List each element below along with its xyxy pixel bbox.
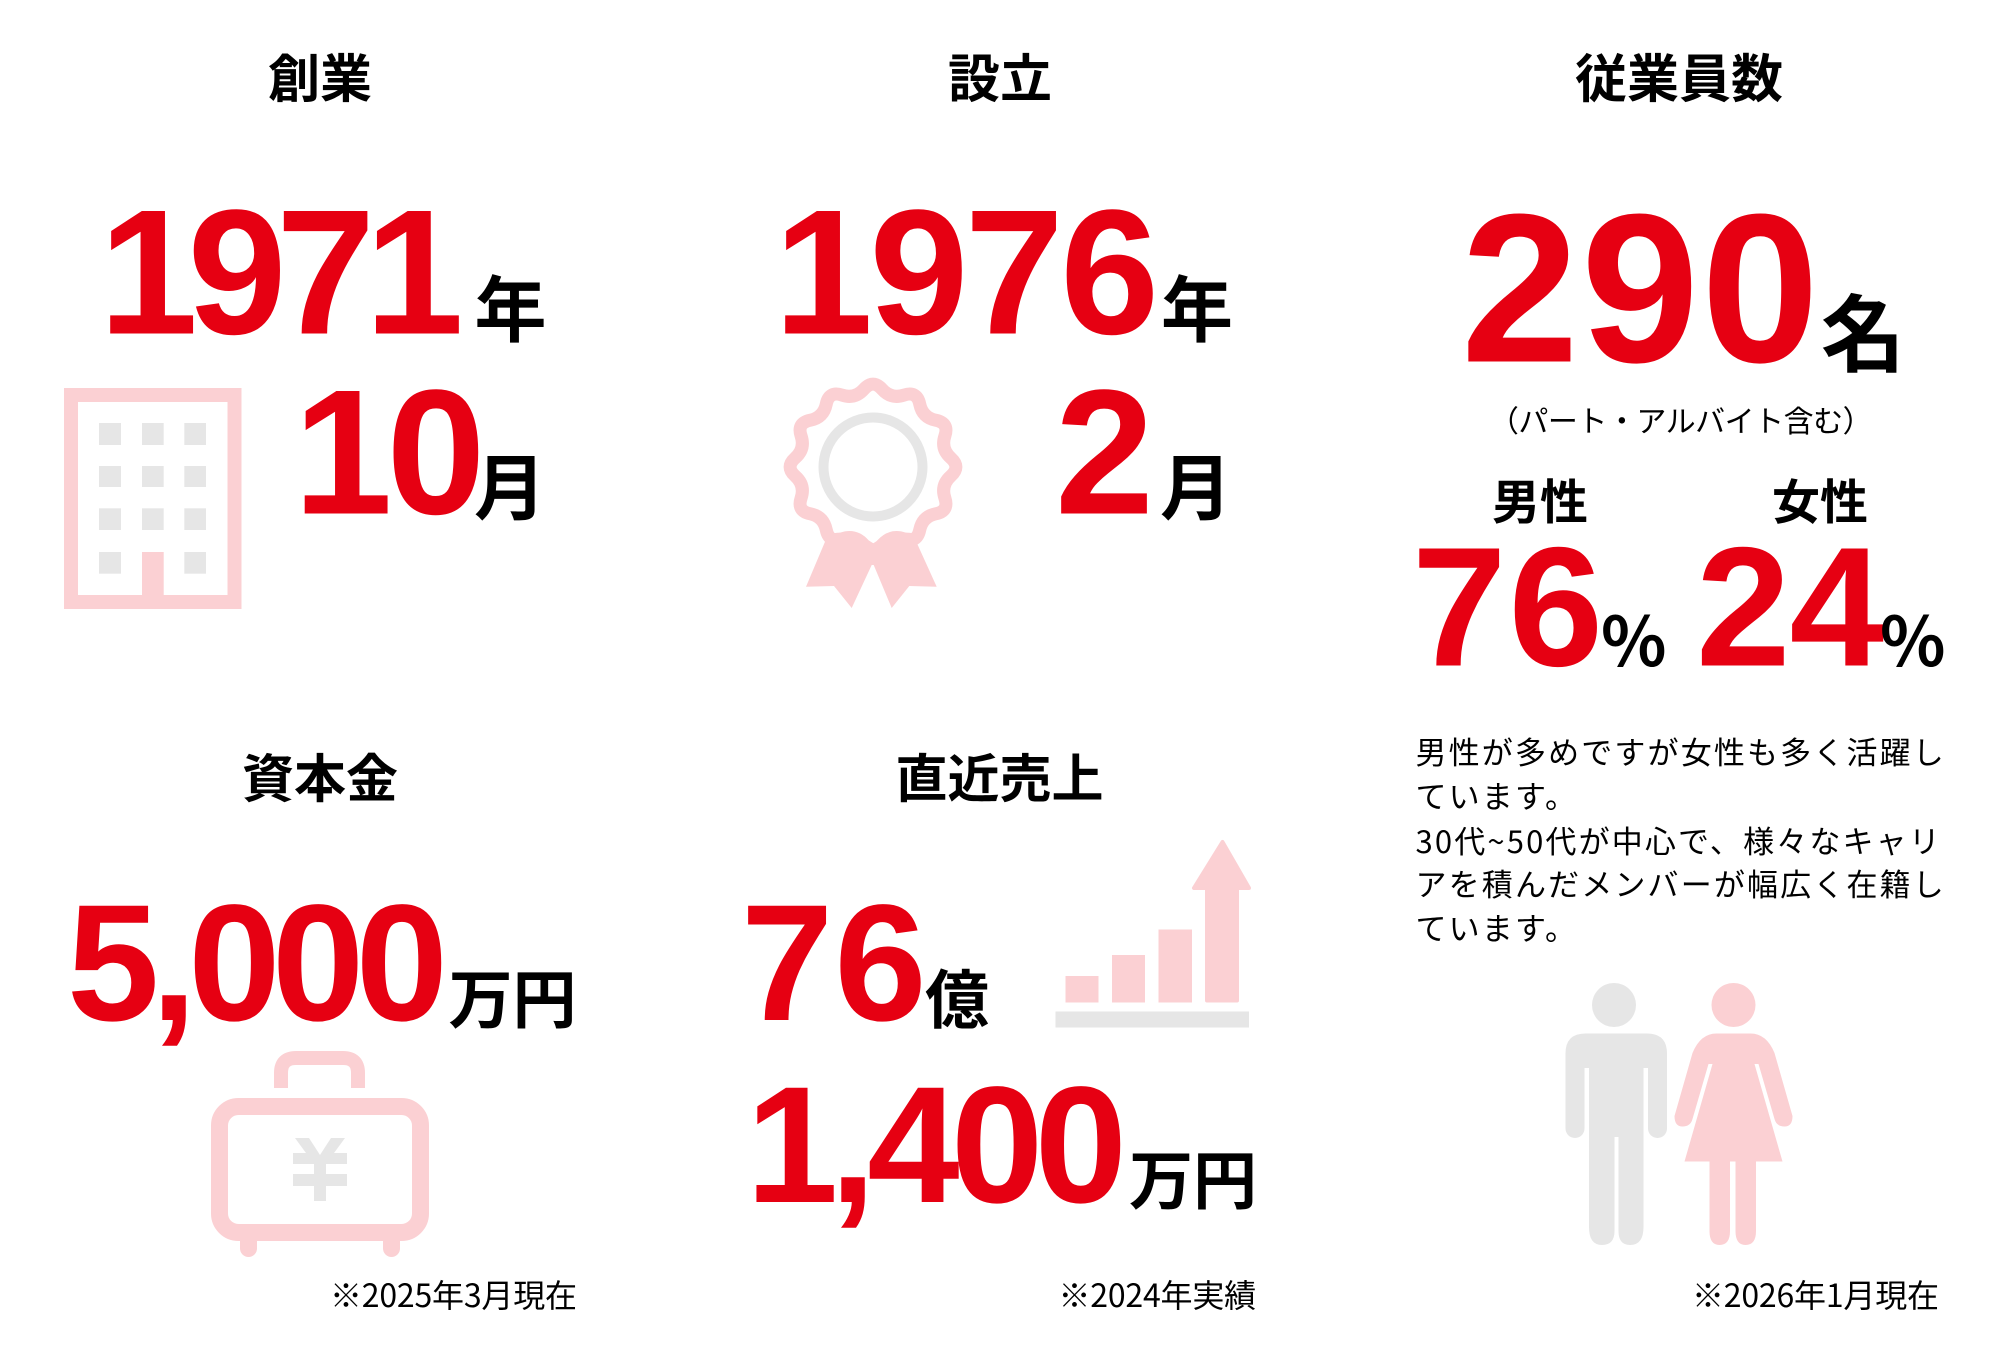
label: male: 男性 [1492,463,1588,533]
label: female: 女性 [1772,463,1868,533]
number: 290: 290 [1461,170,1821,406]
number: 2: 2 [1055,352,1154,552]
panel: founding [64,38,547,609]
text block: description: 男性が多めですが女性も多く活躍し [1416,728,1946,773]
text block: description: 30代~50代が中心で、様々なキャリ [1416,817,1942,862]
footnote: sales year: ※2024年実績 [1058,1271,1256,1317]
panel: recent sales [741,738,1257,1317]
unit: year: 年 [474,252,547,357]
unit: month: 月 [474,430,546,535]
unit: people: 名 [1821,269,1905,390]
unit: month: 月 [1160,430,1232,535]
number: 24 percent: 24 [1696,512,1884,702]
icon: woman [1674,983,1792,1245]
unit: percent: % [1880,587,1945,686]
unit: ten thousand yen: 万円 [1129,1131,1257,1223]
icon: yen suitcase [220,1058,420,1257]
icon: rosette award [790,384,956,608]
number: 10: 10 [294,352,480,552]
panel: employees [1412,38,1946,1317]
heading: capital: 資本金 [242,738,398,812]
number: 76: 76 [741,871,928,1056]
number: 5,000: 5,000 [67,871,442,1056]
number: 1976: 1976 [774,172,1156,372]
unit: percent: % [1601,587,1666,686]
footnote: employees date: ※2026年1月現在 [1692,1271,1939,1317]
icon: growth bar chart with arrow [1056,842,1249,1028]
panel: establishment [774,38,1233,608]
number: 76 percent: 76 [1412,512,1605,702]
text block: description: ています。 [1416,904,1578,949]
text block: description [1416,728,1946,949]
unit: year: 年 [1161,252,1233,357]
panel: capital [67,738,577,1317]
heading: founding: 創業 [268,38,372,112]
heading: establishment: 設立 [948,38,1052,112]
note: including part-time: （パート・アルバイト含む） [1489,397,1872,441]
icon: office building [64,388,242,609]
heading: employees: 従業員数 [1575,38,1783,112]
number: 1,400: 1,400 [746,1053,1121,1238]
footnote: capital date: ※2025年3月現在 [330,1271,577,1317]
icon: man [1566,983,1667,1245]
heading: recent sales: 直近売上 [895,738,1104,812]
number: 1971: 1971 [99,172,460,372]
unit: hundred million: 億 [925,950,989,1042]
unit: ten thousand yen: 万円 [448,950,576,1042]
text block: description: ています。 [1416,772,1578,817]
text block: description: アを積んだメンバーが幅広く在籍し [1416,860,1946,905]
